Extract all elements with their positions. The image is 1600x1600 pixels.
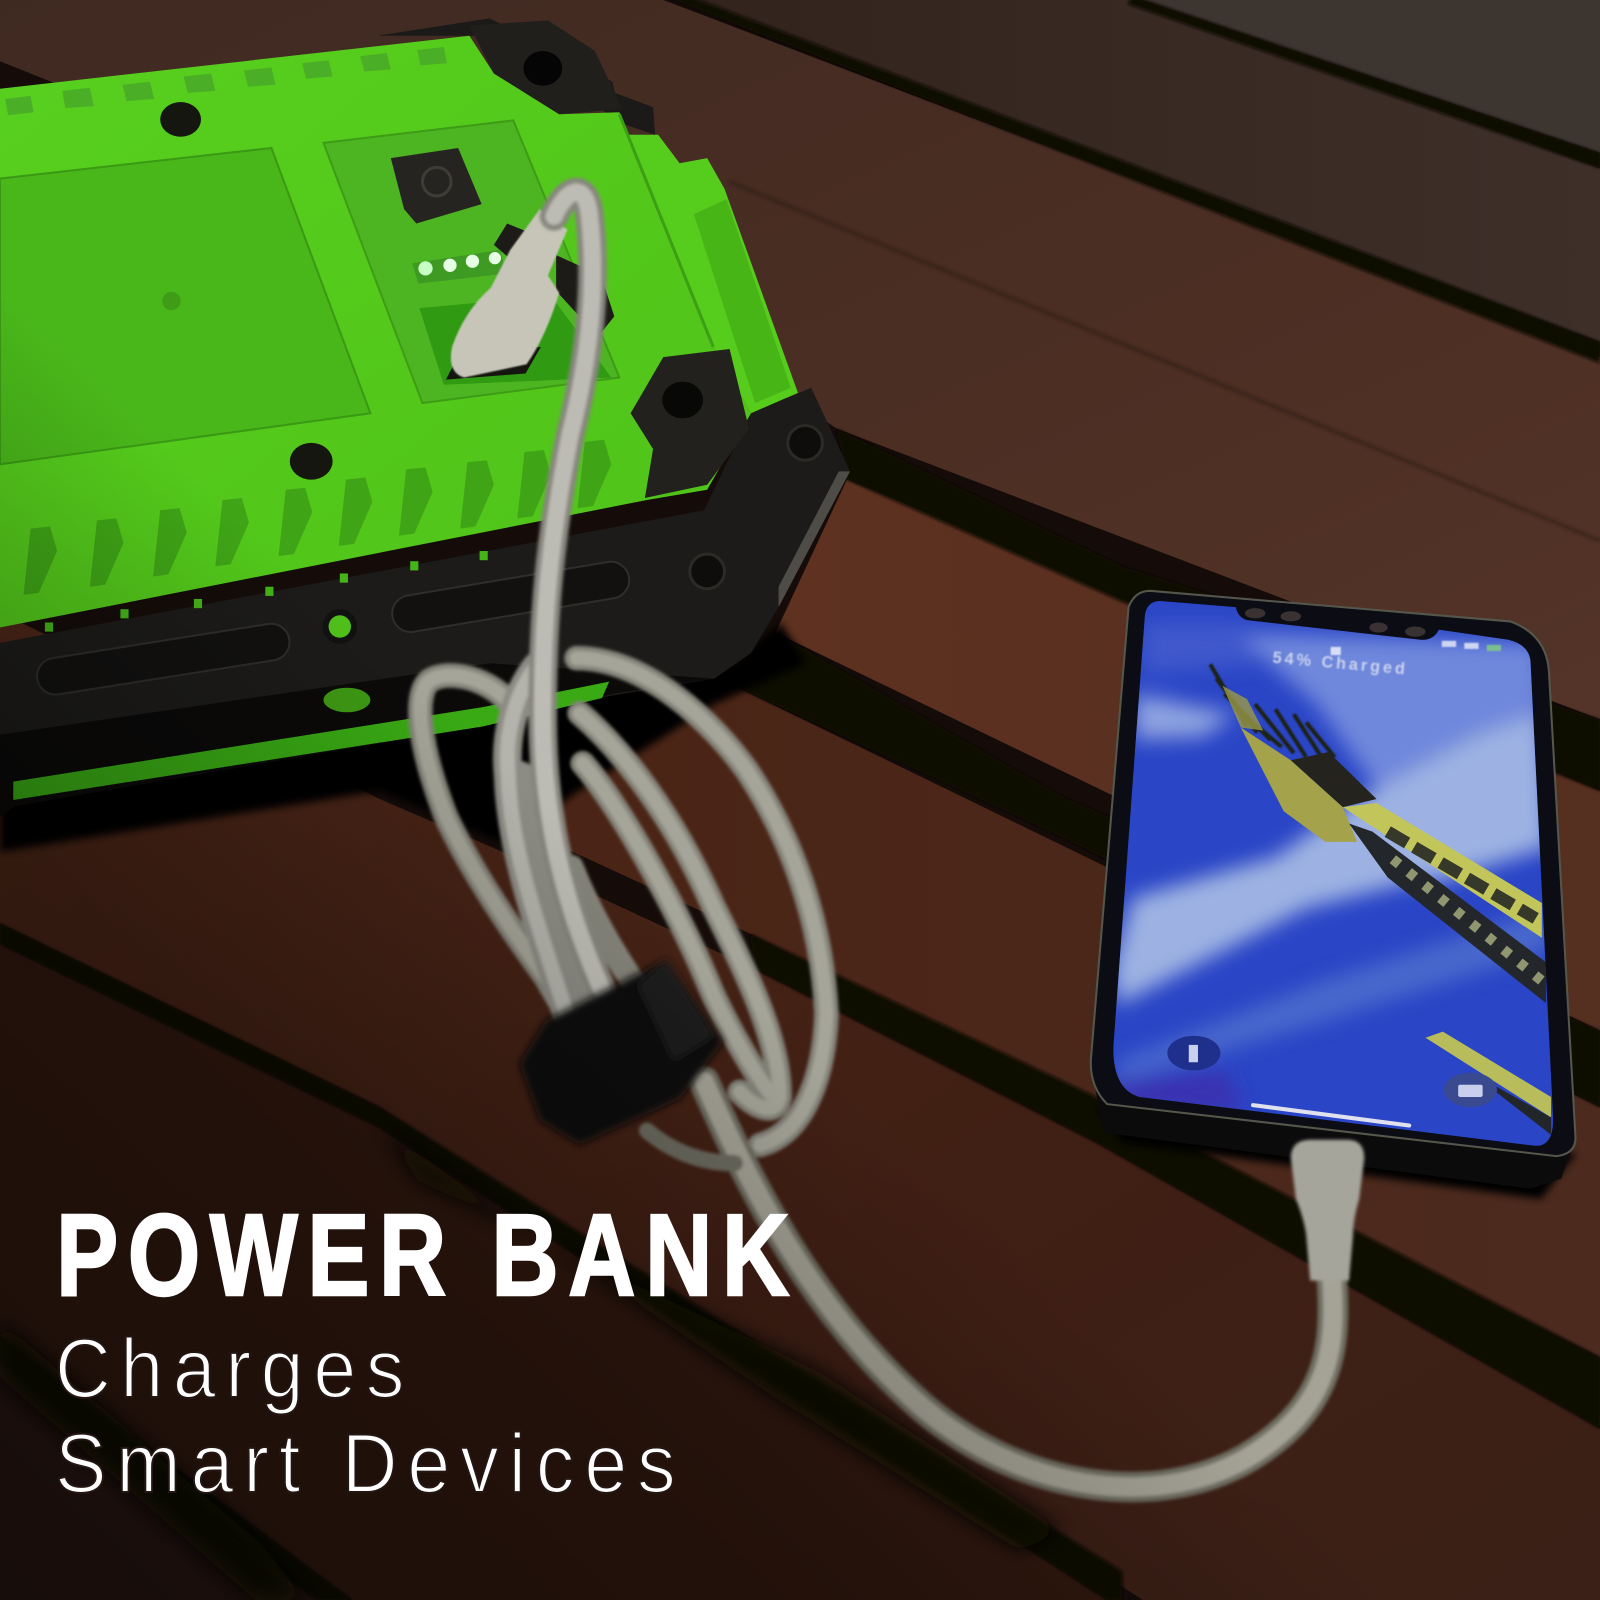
plank: bottom left corner [0,1362,316,1600]
phone shadow [1097,1107,1577,1199]
smartphone [1091,591,1577,1281]
green body [0,36,751,628]
faint grain line [730,182,1600,541]
power bank [0,18,850,816]
top corner bumper [469,20,622,114]
lower corner bumper [631,349,749,498]
icon: power button [391,148,482,223]
LED charge indicators [412,250,506,284]
base ports and screws [34,426,822,712]
black rugged base [0,388,850,791]
recessed control panel [323,120,619,403]
black cable connector [519,959,723,1145]
green pegs [45,551,488,632]
USB plug [451,209,567,378]
phone screen [1113,601,1554,1146]
plank: front [0,944,1107,1600]
long strand to phone [704,1082,1333,1487]
dark underside [0,663,714,816]
crane upper truss [1343,803,1542,938]
plank: upper middle [0,0,1600,719]
recessed label panel [0,148,370,464]
icon: camera [1444,1072,1497,1107]
crane [1210,664,1551,1135]
back loops [420,658,827,1145]
crane tower block [1241,728,1357,842]
vents bottom [23,440,611,595]
green side arm [628,135,798,413]
green lower strip [13,682,609,800]
subtitle line 1: Charges [55,1322,404,1416]
subtitle line 2: Smart Devices [55,1417,676,1511]
plank: centre [496,612,1600,1357]
main vertical strand [543,192,602,990]
vents top [5,47,447,115]
lock screen text: 54% Charged [1272,649,1406,678]
icon: flashlight [1167,1036,1220,1070]
phone body [1091,591,1576,1156]
rear black tab [612,92,655,135]
icon: lock [1331,647,1341,655]
bottom of loop [647,1131,735,1163]
front strands [507,666,602,1020]
clouds [1112,622,1551,1112]
braided cable [420,192,1333,1487]
subtitle [55,1322,676,1511]
shadow under power bank [0,622,806,852]
USB port [419,296,611,385]
plank: top right [1143,0,1600,153]
lightning plug [1291,1140,1364,1281]
rubber flap [494,223,614,337]
rear black bumper [378,18,622,122]
plank: lower left [0,612,1600,1600]
crane lower-right jib [1426,1032,1551,1117]
home indicator [1253,1105,1409,1126]
screw holes [160,102,333,480]
title: POWER BANK: POWER BANK [56,1191,789,1320]
crane spire fins [1210,664,1335,757]
crane lower truss [1349,823,1546,1003]
plank: middle [776,480,1600,1031]
blurred dark band near text [380,1128,1061,1551]
phone underside [1094,1082,1576,1189]
status icons [1442,641,1501,651]
plank: upper [684,0,1600,342]
base side facet [779,471,850,607]
notch sensors [1245,608,1426,637]
